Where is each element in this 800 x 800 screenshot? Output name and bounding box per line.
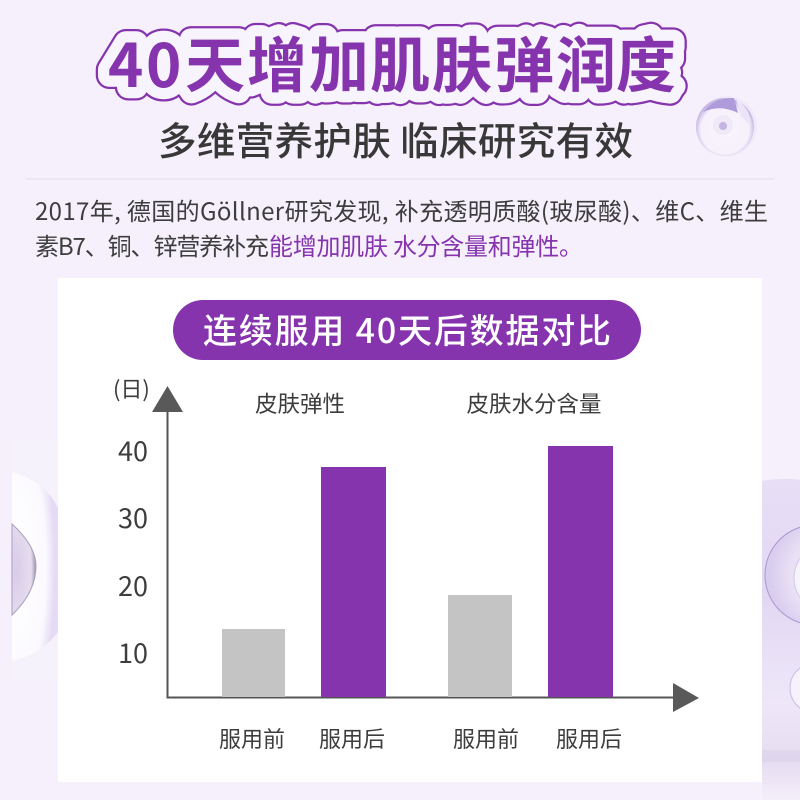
y axis unit: (日) [113,372,150,404]
divider [26,178,774,180]
arrow: x axis [673,683,699,712]
subtitle: 多维营养护肤 临床研究有效 [158,111,633,167]
y axis ticks: 10 [118,632,148,671]
group label: skin moisture: 皮肤水分含量 [466,387,602,419]
x axis labels [219,722,622,754]
heading pill: 连续服用 40天后数据对比 [203,304,611,353]
title: 40天增加肌肤弹润度 [108,18,676,105]
decoration: left water bubble [12,440,58,680]
x axis labels: 服用前 [453,722,519,754]
icon: water droplet [696,96,757,156]
title: 40天增加肌肤弹润度 [108,18,676,105]
axis lines [168,410,675,698]
arrow: y axis [152,386,183,412]
panel: chart [58,278,762,782]
x axis labels: 服用前 [219,722,285,754]
x axis labels: 服用后 [319,722,385,754]
title: 40天增加肌肤弹润度 [108,18,676,105]
y axis ticks: 40 [118,430,148,469]
bar: moisture before [448,595,512,697]
x axis labels: 服用后 [556,722,622,754]
decoration: right water bubbles [762,479,800,800]
bar chart [113,372,699,754]
group label: skin elasticity: 皮肤弹性 [255,387,345,419]
intro text: 2017年, 德国的Göllner研究发现, 补充透明质酸(玻尿酸)、维C、维生 [35,192,768,227]
y axis ticks: 20 [118,565,148,604]
y axis ticks: 30 [118,497,148,536]
intro text: 素B7、铜、锌营养补充 [35,227,269,262]
y axis ticks [118,430,148,671]
intro text: 能增加肌肤 水分含量和弹性。 [269,227,583,262]
bar: moisture after [548,446,613,697]
intro text [35,192,768,262]
bar: elasticity after [321,467,386,697]
bar: elasticity before [222,629,285,697]
